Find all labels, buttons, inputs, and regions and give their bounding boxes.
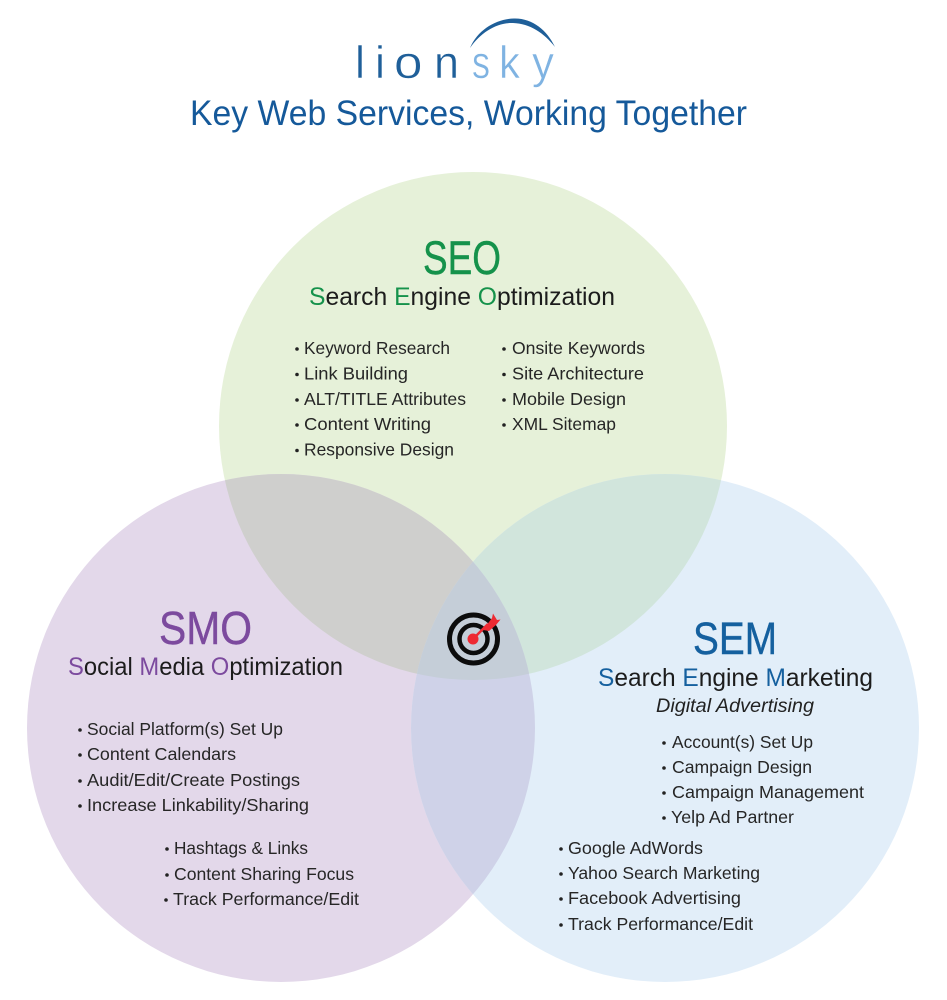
SEO list, right column: Mobile Design <box>512 389 626 409</box>
SEM list, second group: Track Performance/Edit <box>568 914 753 934</box>
SEO list, right column: Site Architecture <box>512 364 644 384</box>
SEM list, first group: Account(s) Set Up <box>672 732 813 752</box>
SEO list, left column: Keyword Research <box>304 338 450 358</box>
SEM list, second group: Facebook Advertising <box>568 888 741 908</box>
SEO list, right column <box>502 338 645 434</box>
SMO list, first group: Audit/Edit/Create Postings <box>87 770 300 790</box>
SEM list, second group: Yahoo Search Marketing <box>568 863 760 883</box>
SMO list, second group: Track Performance/Edit <box>173 889 359 909</box>
SEM tagline: Digital Advertising <box>656 696 814 717</box>
SEM list, first group: Yelp Ad Partner <box>671 807 794 827</box>
logo wordmark: l <box>355 37 365 88</box>
SEO list, left column: Link Building <box>304 364 408 384</box>
logo wordmark: y <box>532 37 554 88</box>
panel: SEM <box>559 613 873 934</box>
SEM list, second group <box>559 838 760 934</box>
SEO subtitle: Search Engine Optimization <box>309 283 615 311</box>
SEO list, right column: Onsite Keywords <box>512 338 645 358</box>
SEM list, first group: Campaign Design <box>672 757 812 777</box>
overlap: SEO and SEM <box>473 474 721 674</box>
logo wordmark: i <box>375 37 385 88</box>
icon: target with dart <box>450 614 500 663</box>
SEM heading: SEM <box>693 613 777 664</box>
SMO list, first group: Social Platform(s) Set Up <box>87 719 283 739</box>
circle: SEO <box>219 172 727 680</box>
logo wordmark <box>355 37 554 88</box>
logo: lionsky <box>355 18 555 88</box>
panel: SEO <box>295 231 645 460</box>
logo arc <box>470 18 555 48</box>
logo wordmark: o <box>394 37 422 88</box>
SMO heading: SMO <box>159 602 252 654</box>
SMO subtitle: Social Media Optimization <box>68 653 343 681</box>
overlap: all three <box>417 562 529 680</box>
SEM list, first group <box>662 732 864 827</box>
SMO list, second group: Content Sharing Focus <box>174 864 354 884</box>
logo wordmark: k <box>499 37 520 88</box>
SEO heading: SEO <box>423 231 501 284</box>
SMO list, first group: Content Calendars <box>87 744 236 764</box>
SEO list, left column: Content Writing <box>304 414 431 434</box>
SEO list, left column <box>295 338 466 460</box>
SMO list, second group <box>164 838 359 909</box>
SEO list, left column: ALT/TITLE Attributes <box>304 389 466 409</box>
SMO list, first group <box>78 719 309 815</box>
panel: SMO <box>68 602 359 909</box>
circle: SEM <box>411 474 919 982</box>
venn diagram circles <box>27 172 919 982</box>
logo wordmark: n <box>434 37 459 88</box>
title: Key Web Services, Working Together <box>190 94 747 133</box>
SEM subtitle: Search Engine Marketing <box>598 664 873 692</box>
overlap: SEO and SMO <box>225 474 473 674</box>
SEO list, right column: XML Sitemap <box>512 414 616 434</box>
overlap: SMO and SEM <box>411 674 535 894</box>
logo wordmark: s <box>472 37 490 88</box>
SEO list, left column: Responsive Design <box>304 440 454 460</box>
circle: SMO <box>27 474 535 982</box>
SMO list, first group: Increase Linkability/Sharing <box>87 795 309 815</box>
SMO list, second group: Hashtags & Links <box>174 838 308 858</box>
SEM list, first group: Campaign Management <box>672 782 864 802</box>
SEM list, second group: Google AdWords <box>568 838 703 858</box>
